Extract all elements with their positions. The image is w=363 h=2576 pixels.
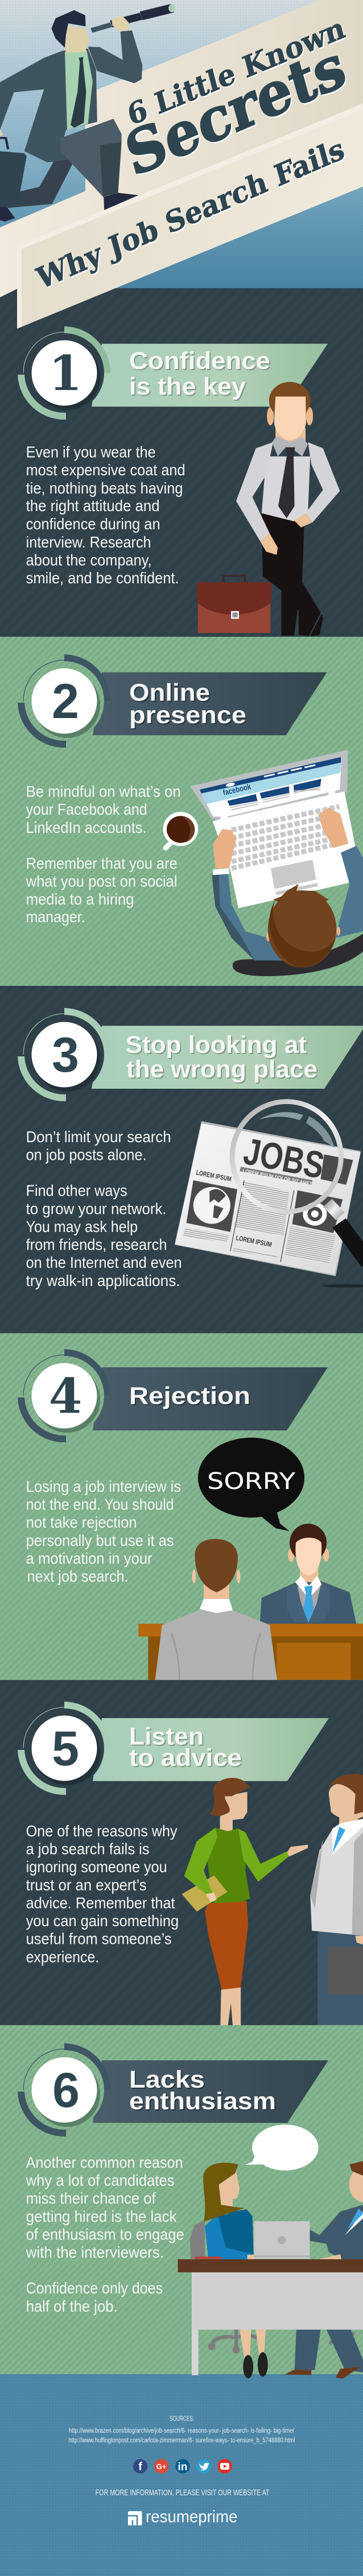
number badge 1: 1	[49, 345, 82, 401]
title text: Why Job Search Fails	[33, 131, 348, 296]
heading banner	[93, 2060, 328, 2123]
icon: interview scene	[138, 1524, 363, 1680]
body text: most expensive coat and	[26, 461, 185, 479]
source links	[68, 2428, 295, 2444]
body text: confidence during an	[26, 515, 160, 533]
body text: LinkedIn accounts.	[26, 819, 147, 836]
body text: trust or an expert’s	[26, 1876, 147, 1894]
body text: next job search.	[27, 1567, 129, 1585]
body text: of enthusiasm to engage	[26, 2225, 184, 2243]
body text: smile, and be confident.	[26, 569, 179, 587]
cream ribbon	[0, 0, 363, 329]
icon: magnifying glass	[232, 1102, 363, 1262]
body text: about the company,	[26, 551, 152, 569]
body text: half of the job.	[26, 2297, 118, 2315]
heading text: Confidence	[129, 347, 270, 375]
body text: Find other ways	[26, 1182, 127, 1200]
number badge 6	[18, 2043, 110, 2137]
icon: person at laptop from above	[190, 750, 363, 976]
social icons: f	[138, 2461, 142, 2473]
body text: personally but use it as	[26, 1532, 174, 1549]
body text: Even if you wear the	[26, 443, 156, 461]
body text: experience.	[26, 1948, 99, 1965]
body text: useful from someone’s	[26, 1930, 172, 1948]
panel: hero header	[0, 0, 363, 329]
social icons: G+	[156, 2462, 167, 2471]
body text: manager.	[26, 908, 85, 926]
body text: a job search fails is	[26, 1840, 150, 1858]
icon: interview at desk	[178, 2161, 363, 2378]
heading text	[129, 2066, 276, 2115]
body text: to grow your network.	[26, 1200, 167, 1217]
source links: http://www.huffingtonpost.com/carlota-zimmerman/6- surefire-ways- to-ensure_b_5748880.html	[68, 2437, 295, 2444]
heading text: the wrong place	[126, 1056, 317, 1083]
sources heading: SOURCES:	[170, 2416, 194, 2422]
speech bubble: sorry	[198, 1438, 304, 1531]
heading banner	[93, 1718, 329, 1781]
heading text	[129, 679, 246, 729]
icon: newspaper	[175, 1121, 363, 1288]
heading text: is the key	[129, 373, 246, 400]
body text: your Facebook and	[26, 800, 147, 818]
number badge 6: 6	[52, 2063, 80, 2118]
number badge 4: 4	[49, 1368, 82, 1424]
body text: on the Internet and even	[26, 1254, 182, 1271]
call to action text: FOR MORE INFORMATION, PLEASE VISIT OUR WEBSITE AT	[96, 2488, 270, 2498]
heading text: enthusiasm	[129, 2088, 276, 2115]
heading text	[129, 347, 270, 400]
body text	[26, 1128, 182, 1289]
panel: section 5 listen to advice	[0, 1680, 363, 2025]
icon: newspaper: LOREM IPSUM DOLOR SIT AMET	[242, 1168, 313, 1187]
body text: you can gain something	[26, 1912, 179, 1930]
body text: Losing a job interview is	[26, 1478, 181, 1495]
heading banner	[92, 1026, 363, 1089]
social icons	[133, 2459, 232, 2474]
facebook label: facebook	[222, 782, 252, 797]
heading banner	[93, 672, 327, 735]
body text	[26, 443, 185, 587]
body text	[26, 1478, 181, 1585]
body text: media to a hiring	[26, 890, 134, 908]
heading text: Listen	[129, 1723, 204, 1750]
heading banner	[92, 344, 328, 406]
title text	[33, 10, 352, 296]
title text: 6 Little Known	[124, 10, 348, 132]
body text: with the interviewers.	[26, 2243, 164, 2261]
heading text: Stop looking at	[125, 1031, 307, 1059]
body text: try walk-in applications.	[26, 1272, 180, 1289]
number badge 2	[18, 654, 110, 748]
body text: Don’t limit your search	[26, 1128, 171, 1146]
body text: the right attitude and	[26, 497, 160, 515]
lower ribbon band	[17, 103, 363, 329]
icon: newspaper: LOREM IPSUM	[235, 1234, 273, 1248]
heading text: Online	[129, 679, 210, 707]
source links: http://www.brazen.com/blog/archive/job-search/6- reasons-your- job-search- is-failing- big-time/	[69, 2428, 295, 2434]
panel: section 1 background	[0, 288, 363, 637]
body text	[26, 1822, 179, 1965]
social icons: in	[178, 2461, 187, 2473]
heading banner	[93, 1367, 328, 1430]
heading text: Rejection	[129, 1383, 250, 1410]
body text: One of the reasons why	[26, 1822, 178, 1840]
panel: section 1 confidence	[18, 326, 340, 636]
body text: Another common reason	[26, 2154, 183, 2171]
heading text: presence	[129, 702, 246, 729]
body text: Confidence only does	[26, 2279, 163, 2297]
icon: businessman with telescope	[0, 4, 175, 222]
body text	[26, 782, 181, 926]
panel: section 3 stop looking	[0, 986, 363, 1333]
icon: standing man and briefcase	[197, 382, 340, 636]
body text: ignoring someone you	[26, 1858, 167, 1876]
body text: not take rejection	[26, 1513, 137, 1531]
number badge 1	[18, 326, 110, 420]
body text: from friends, research	[26, 1236, 167, 1253]
icon: brown shoes	[284, 2367, 360, 2379]
body text: not the end. You should	[26, 1495, 174, 1513]
icon: coffee cup	[163, 812, 198, 848]
number badge 3: 3	[52, 1028, 79, 1082]
heading text	[129, 1723, 242, 1772]
icon: newspaper: LOREM IPSUM	[195, 1168, 232, 1183]
icon: woman talking	[182, 1778, 308, 2025]
heading text: to advice	[129, 1744, 242, 1772]
heading text	[125, 1031, 317, 1083]
body text: getting hired is the lack	[26, 2208, 178, 2225]
title text: Secrets	[118, 31, 352, 190]
body text: You may ask help	[26, 1218, 138, 1235]
body text: on job posts alone.	[26, 1146, 147, 1163]
speech bubble: empty	[245, 2125, 318, 2171]
body text: why a lot of candidates	[26, 2172, 175, 2189]
number badge 2: 2	[52, 674, 79, 729]
body text: what you post on social	[26, 873, 178, 890]
body text: tie, nothing beats having	[26, 479, 183, 497]
body text: a motivation in your	[26, 1549, 152, 1567]
panel: section 2 online presence	[0, 637, 363, 986]
body text	[26, 2154, 184, 2315]
speech bubble: sorry: SORRY	[207, 1469, 296, 1495]
number badge 4	[18, 1349, 110, 1442]
body text: advice. Remember that	[26, 1894, 175, 1911]
body text: Be mindful on what’s on	[26, 782, 181, 800]
panel: section 4 rejection	[0, 1333, 363, 1680]
icon: newspaper: JOBS	[240, 1130, 328, 1187]
heading text: Lacks	[129, 2066, 205, 2093]
panel: section 6 lacks enthusiasm	[0, 2025, 363, 2379]
number badge 5: 5	[52, 1722, 79, 1776]
body text: Remember that you are	[26, 854, 178, 872]
panel: footer	[0, 2374, 363, 2576]
logo: resumeprime: resumeprime	[146, 2507, 238, 2527]
number badge 5	[18, 1702, 110, 1795]
icon: man listening	[310, 1774, 363, 2025]
body text: miss their chance of	[26, 2189, 156, 2207]
number badge 3	[18, 1008, 110, 1101]
body text: interview. Research	[26, 533, 151, 551]
